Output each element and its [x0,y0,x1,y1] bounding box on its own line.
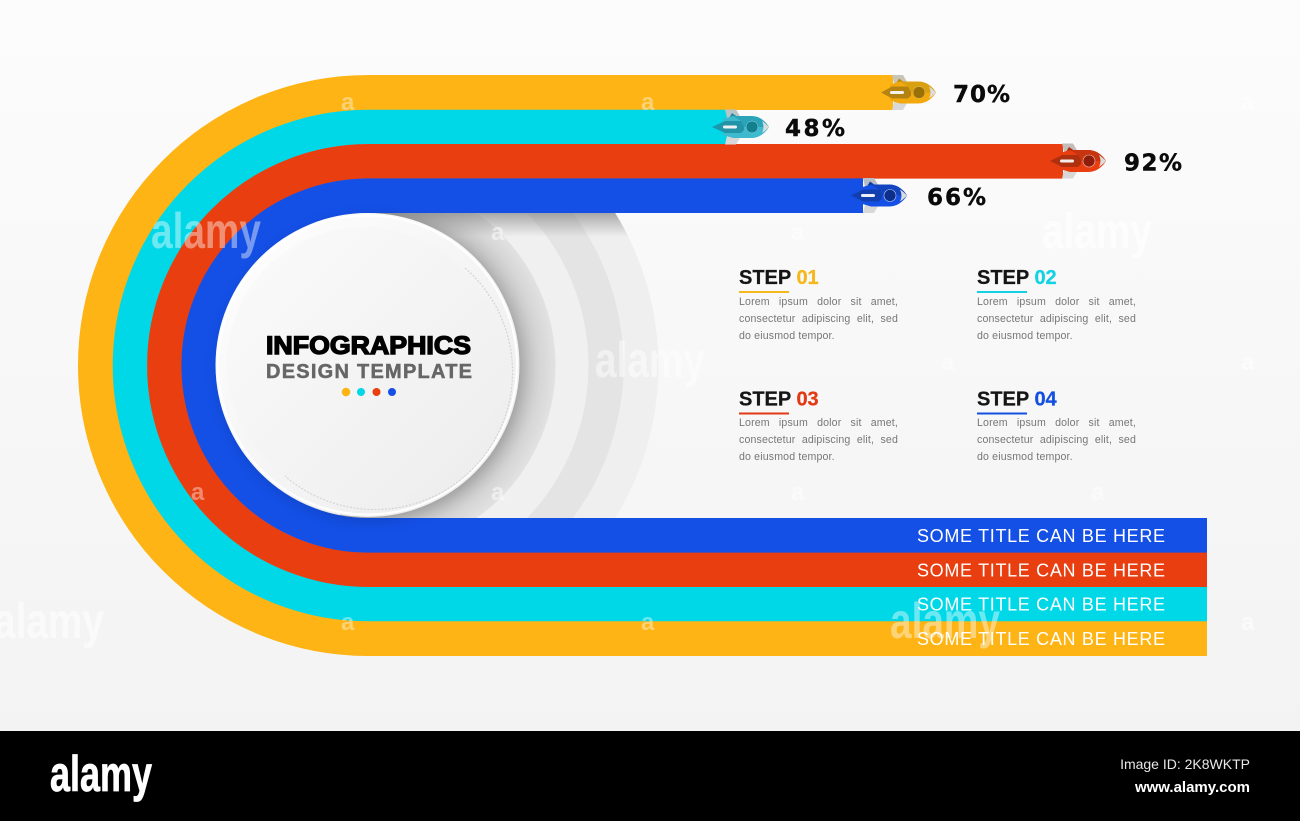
step 01 text: Lorem ipsum dolor sit amet, consectetur adipiscing elit, sed do eiusmod tempor. [739,296,898,342]
cyan band [130,127,1207,604]
percentage: 70%: 70% [953,82,1010,108]
watermarks: a [1241,349,1255,376]
step 03 text: Lorem ipsum dolor sit amet, consectetur adipiscing elit, sed do eiusmod tempor. [739,417,898,463]
watermarks: a [491,219,505,246]
step 02 text: Lorem ipsum dolor sit amet, consectetur adipiscing elit, sed do eiusmod tempor. [977,296,1136,342]
centre title [266,332,472,396]
watermarks: a [491,479,505,506]
centre subtitle: DESIGN TEMPLATE [266,361,472,383]
footer image id: Image ID: 2K8WKTP [1120,756,1250,772]
centre disc [216,213,522,521]
step 04 heading: STEP 04 [977,388,1058,410]
watermarks [0,89,1255,649]
red band [164,161,1207,570]
band title: yellow: SOME TITLE CAN BE HERE [917,629,1165,649]
footer url: www.alamy.com [1134,779,1250,796]
rocket: blue [851,178,907,213]
band title: blue: SOME TITLE CAN BE HERE [917,526,1165,546]
centre title: INFOGRAPHICS [266,332,471,360]
watermarks: alamy [151,203,261,259]
yellow band [95,92,1207,638]
step 01 heading: STEP 01 [739,267,819,289]
concentric shadow rings [340,213,658,518]
band title: cyan: SOME TITLE CAN BE HERE [917,594,1165,614]
watermarks: a [641,609,655,636]
blue band [199,196,1207,535]
watermarks: alamy [595,332,705,388]
percentage: 66%: 66% [927,185,986,211]
step 03 heading: STEP 03 [739,388,819,410]
watermarks: alamy [890,593,1000,649]
watermarks: alamy [1042,203,1152,259]
watermarks: a [341,89,355,116]
black footer bar [0,731,1300,821]
watermarks: a [1091,479,1105,506]
percentage: 92%: 92% [1124,150,1182,176]
footer logo: alamy [50,746,152,802]
watermarks: a [641,89,655,116]
rocket: red [1050,144,1106,178]
band title: red: SOME TITLE CAN BE HERE [917,560,1165,580]
watermarks: a [941,349,955,376]
rocket: yellow [881,75,936,110]
watermarks: a [791,219,805,246]
watermarks: a [791,479,805,506]
watermarks: a [1241,609,1255,636]
watermarks: a [1241,89,1255,116]
rocket: cyan [712,110,769,144]
percentage: 48%: 48% [785,116,845,142]
step 04 text: Lorem ipsum dolor sit amet, consectetur adipiscing elit, sed do eiusmod tempor. [977,417,1136,463]
watermarks: a [341,609,355,636]
step 02 heading: STEP 02 [977,267,1057,289]
watermarks: a [191,479,205,506]
centre colour dots [342,388,396,396]
